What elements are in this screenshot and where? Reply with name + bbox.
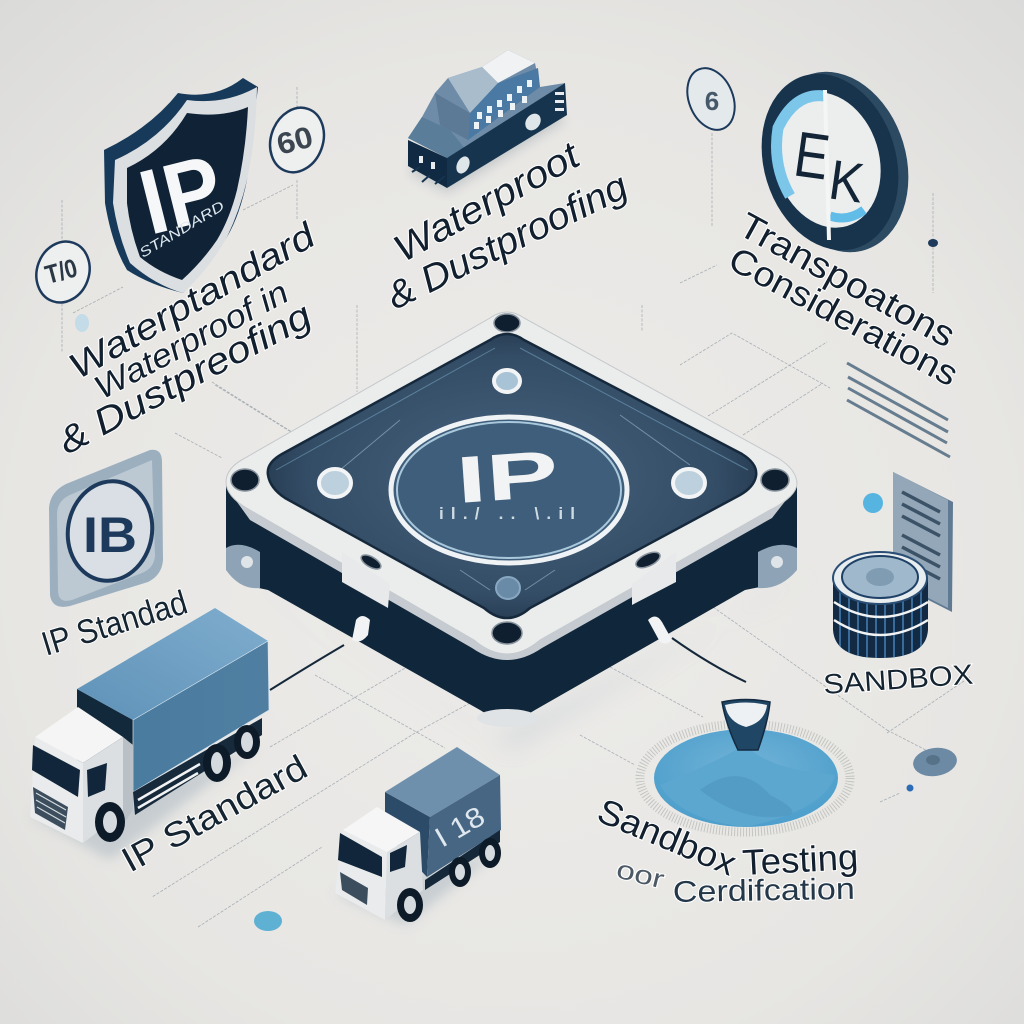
- shield label standard: STANDARD: [136, 197, 227, 261]
- heading: waterproof left: & Dustpreofing: [52, 294, 318, 462]
- icon: small gauge: [911, 745, 959, 779]
- label: SANDBOX: SANDBOX: [822, 659, 974, 700]
- label: IP Standard: IP Standad: [37, 583, 192, 664]
- heading: waterproof center: Waterproot: [387, 134, 588, 271]
- enclosure white frame: [226, 312, 797, 654]
- icon: IP standard square badge: [49, 450, 163, 607]
- heading: transportation considerations: Considerations: [722, 240, 965, 394]
- accent dot right: [863, 493, 883, 513]
- icon: sandbox test pool: [640, 700, 850, 832]
- icon: EK disc: K: [825, 147, 868, 215]
- heading: waterproof left: Waterptandard: [62, 214, 323, 387]
- icon: badge 6: [679, 61, 743, 137]
- glass screws: [319, 370, 705, 599]
- background guide lines: [62, 87, 970, 927]
- heading: waterproof center: & Dustproofing: [381, 165, 634, 318]
- icon: small truck: [335, 747, 501, 925]
- corner bolts: [231, 314, 789, 644]
- icon: badge 10: T/0: [42, 253, 80, 290]
- cable plugs: [352, 616, 672, 644]
- accent dot pool: [906, 784, 914, 792]
- central IP mark: IP: [454, 436, 561, 517]
- label: sandbox testing: [592, 791, 859, 909]
- icon: badge 6: 6: [705, 86, 719, 116]
- heading: waterproof left: Waterproof in: [88, 273, 294, 406]
- label: sandbox testing: Cerdifcation: [673, 873, 855, 909]
- icon: IP standard shield: [104, 78, 258, 293]
- icon: coin stack: [830, 552, 932, 658]
- icon: badge 60: 60: [273, 121, 317, 162]
- text lines: placeholder list: [847, 363, 950, 457]
- icon: EK disc: E: [790, 118, 834, 194]
- label: sandbox testing: oor: [614, 854, 668, 895]
- connector cable left: [270, 645, 344, 690]
- icon: IP standard square badge: IB: [83, 507, 137, 563]
- icon: large truck: [30, 608, 269, 860]
- label: sandbox testing: Testing: [741, 836, 859, 883]
- label: sandbox testing: Sandbox: [592, 791, 742, 884]
- central ring: [391, 417, 627, 563]
- central small text: il./ .. \.il: [439, 504, 575, 523]
- accent dot bottom: [254, 911, 282, 931]
- label: IP standard lower: IP Standard: [115, 748, 314, 880]
- enclosure dark glass: [268, 334, 756, 618]
- connector cable right: [672, 638, 746, 682]
- icon: dot marker right: [928, 239, 938, 247]
- central IP enclosure: [226, 312, 797, 727]
- accent dot left: [75, 314, 89, 332]
- icon: document: [893, 472, 953, 612]
- icon: badge 60: [261, 100, 333, 180]
- shield label IP: IP: [130, 136, 232, 254]
- icon: badge 10: [28, 234, 98, 310]
- enclosure base: [226, 485, 797, 719]
- side clips: [342, 552, 676, 608]
- icon: EK disc: [741, 54, 930, 270]
- heading: waterproof left: [52, 214, 323, 462]
- icon: isometric building device: [408, 50, 567, 192]
- corner feet: [226, 545, 797, 727]
- heading: transportation considerations: Transpoatons: [732, 204, 962, 355]
- shadow under enclosure: [215, 560, 820, 745]
- icon: small truck: I 18: [430, 800, 490, 853]
